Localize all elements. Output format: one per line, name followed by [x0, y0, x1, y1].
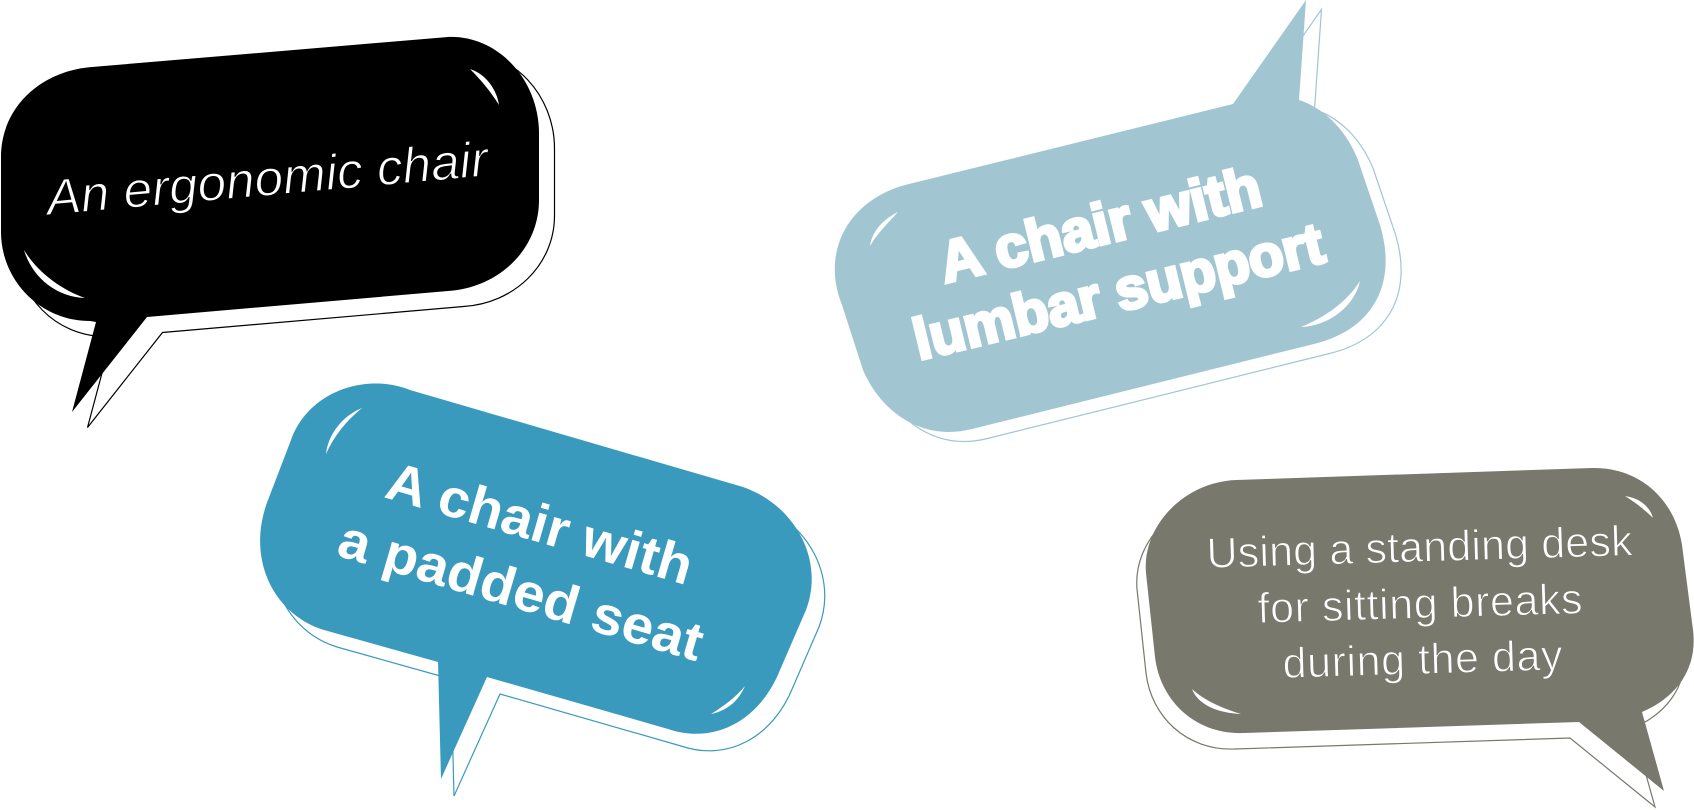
- highlight: upper left: [870, 212, 898, 246]
- bubble outline: blue: [273, 400, 825, 796]
- highlight: upper left: [326, 408, 362, 454]
- text: Using a standing desk for sitting breaks during the day: [1206, 517, 1634, 688]
- highlight: lower right: [1301, 281, 1360, 327]
- text: An ergonomic chair: An ergonomic chair: [41, 131, 493, 226]
- bubble body: grey: [1146, 468, 1694, 791]
- bubble body: blue: [260, 383, 812, 779]
- highlight: bottom left: [1192, 689, 1241, 714]
- panel: lumbar support bubble: [835, 0, 1401, 441]
- panel: padded seat bubble: [260, 383, 825, 796]
- bubble body: black: [1, 37, 539, 412]
- highlight: lower right: [711, 686, 745, 714]
- text: A chair with a padded seat: a padded seat: [332, 509, 710, 673]
- text: Using a standing desk for sitting breaks during the day: during the day: [1282, 632, 1564, 688]
- highlight: top right: [470, 69, 499, 105]
- bubble body: light blue: [835, 0, 1386, 432]
- highlight: top right: [1625, 496, 1653, 518]
- text: A chair with a padded seat: [332, 451, 710, 673]
- panel: ergonomic chair bubble: [1, 37, 554, 428]
- text: A chair with a padded seat: A chair with: [380, 451, 700, 597]
- bubble outline: black: [16, 52, 554, 428]
- text: Using a standing desk for sitting breaks during the day: for sitting breaks: [1257, 575, 1583, 633]
- bubble outline: light blue: [850, 10, 1401, 441]
- text: Using a standing desk for sitting breaks during the day: Using a standing desk: [1206, 517, 1634, 578]
- panel: standing desk bubble: [1137, 468, 1694, 807]
- bubble outline: grey: [1137, 484, 1685, 807]
- text: A chair with lumbar support: A chair with: [933, 154, 1268, 296]
- highlight: bottom left: [24, 250, 85, 298]
- text: A chair with lumbar support: lumbar support: [907, 211, 1330, 373]
